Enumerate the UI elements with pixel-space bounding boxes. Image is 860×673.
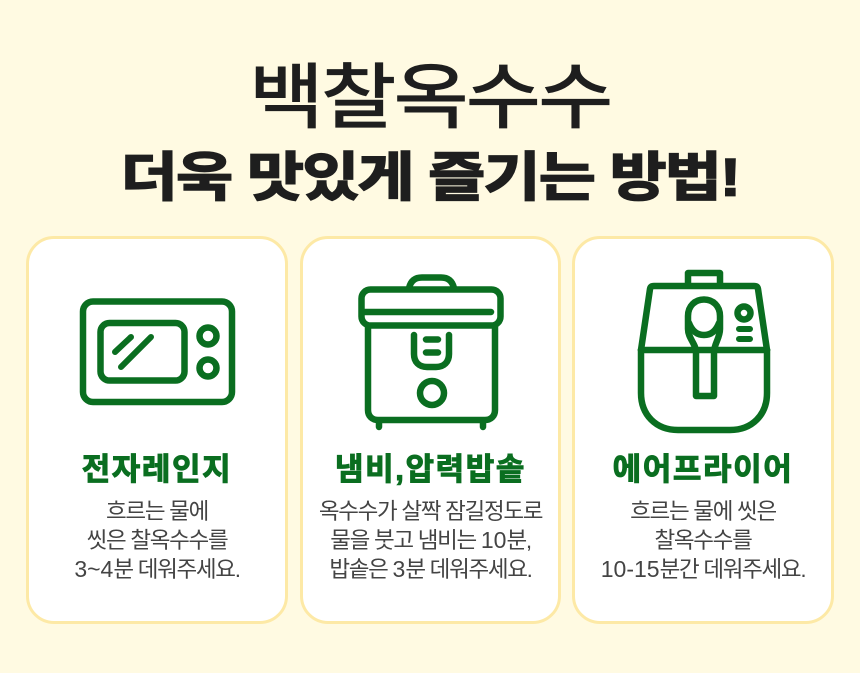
text: microwave instructions: 3~4분 데워주세요.: [74, 556, 240, 582]
title: 백찰옥수수: [249, 59, 611, 138]
subtitle: 더욱 맛있게 즐기는 방법!: [121, 148, 739, 207]
heading: pot and rice cooker: 냄비,압력밥솥: [335, 452, 526, 487]
text: microwave instructions: 흐르는 물에: [106, 499, 208, 524]
text: pot instructions: 옥수수가 살짝 잠길정도로: [319, 499, 542, 524]
heading: air fryer: 에어프라이어: [613, 452, 793, 487]
panel: pot and rice cooker: [300, 236, 561, 624]
text: pot instructions: 물을 붓고 냄비는 10분,: [330, 527, 531, 553]
icon: microwave: [83, 302, 232, 402]
text: air fryer instructions: 찰옥수수를: [654, 528, 752, 553]
text: air fryer instructions: 흐르는 물에 씻은: [630, 499, 776, 524]
icon: air fryer: [641, 273, 767, 430]
text: microwave instructions: [74, 499, 240, 582]
heading: microwave: 전자레인지: [82, 452, 232, 487]
text: pot instructions: 밥솥은 3분 데워주세요.: [329, 556, 532, 582]
panel: microwave: [26, 236, 288, 624]
text: air fryer instructions: 10-15분간 데워주세요.: [601, 556, 805, 582]
panel: air fryer: [572, 236, 834, 624]
text: air fryer instructions: [601, 499, 805, 582]
text: pot instructions: [319, 499, 542, 582]
icon: rice cooker: [362, 278, 500, 427]
text: microwave instructions: 씻은 찰옥수수를: [87, 528, 227, 553]
